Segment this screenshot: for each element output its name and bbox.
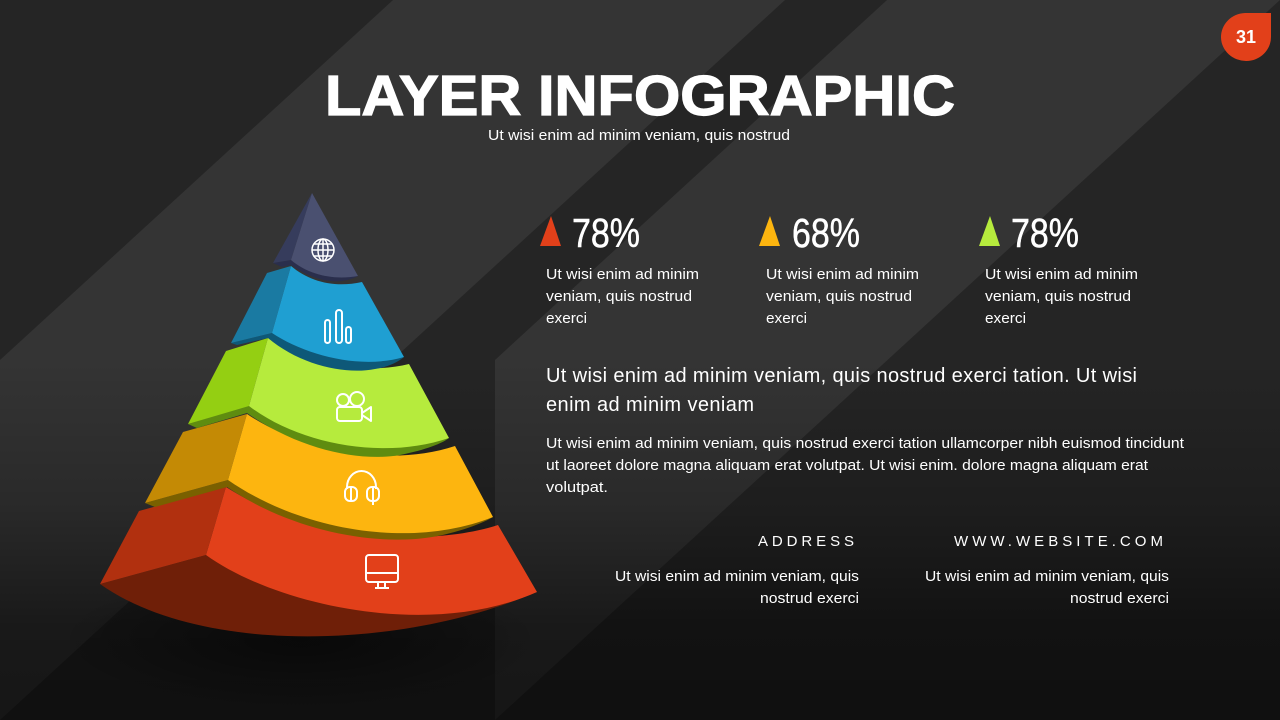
stat 1: 78% red: veniam, quis nostrud [546,288,692,305]
website block: WWW.WEBSITE.COM [954,533,1163,550]
stat 3: 78% green: veniam, quis nostrud [985,288,1131,305]
layer 5: navy top with globe icon [273,193,358,281]
website block [925,533,1169,607]
stat 3: 78% green: Ut wisi enim ad minim [985,266,1138,283]
address block [615,533,859,607]
stat 1: 78% red: 78% [572,210,640,256]
address block: Ut wisi enim ad minim veniam, quis [615,568,859,585]
icon: globe [312,239,334,261]
body paragraph: ut laoreet dolore magna aliquam erat volutpat. Ut wisi enim. dolore magna aliquam erat [546,457,1149,474]
icon: headphones [345,471,379,505]
stat 3: 78% green: exerci [985,310,1026,327]
layer 1: red base with monitor icon [100,487,537,636]
body paragraph [546,435,1185,496]
layer 3: green with video camera icon [188,338,449,457]
subtitle: Ut wisi enim ad minim veniam, quis nostrud [488,127,790,144]
layer 2: orange with headphones icon [145,414,493,540]
stat 1: 78% red: exerci [546,310,587,327]
stat 2: 68% orange: 68% [792,210,860,256]
stat 1: 78% red [540,210,699,327]
layered pyramid chart [60,193,540,710]
stat 1: 78% red: Ut wisi enim ad minim [546,266,699,283]
stat 2: 68% orange: Ut wisi enim ad minim [766,266,919,283]
stat 3: 78% green: 78% [1011,210,1079,256]
icon: monitor [366,555,398,588]
page number badge: 31 [1236,27,1256,47]
title: LAYER INFOGRAPHIC [325,64,955,128]
section heading: Ut wisi enim ad minim veniam, quis nostrud exerci tation. Ut wisi [546,365,1137,387]
address block: ADDRESS [758,533,854,550]
page number badge [1221,13,1271,61]
layer 4: blue with bar chart icon [231,266,404,371]
section heading: enim ad minim veniam [546,394,754,416]
website block: nostrud exerci [1070,590,1169,607]
stat 2: 68% orange: veniam, quis nostrud [766,288,912,305]
icon: video camera [337,392,371,421]
icon: bars [325,310,351,343]
address block: nostrud exerci [760,590,859,607]
section heading [546,365,1137,416]
stat 2: 68% orange [759,210,919,327]
body paragraph: Ut wisi enim ad minim veniam, quis nostrud exerci tation ullamcorper nibh euismod tincidunt [546,435,1185,452]
body paragraph: volutpat. [546,479,608,496]
stat 2: 68% orange: exerci [766,310,807,327]
website block: Ut wisi enim ad minim veniam, quis [925,568,1169,585]
stat 3: 78% green [979,210,1138,327]
